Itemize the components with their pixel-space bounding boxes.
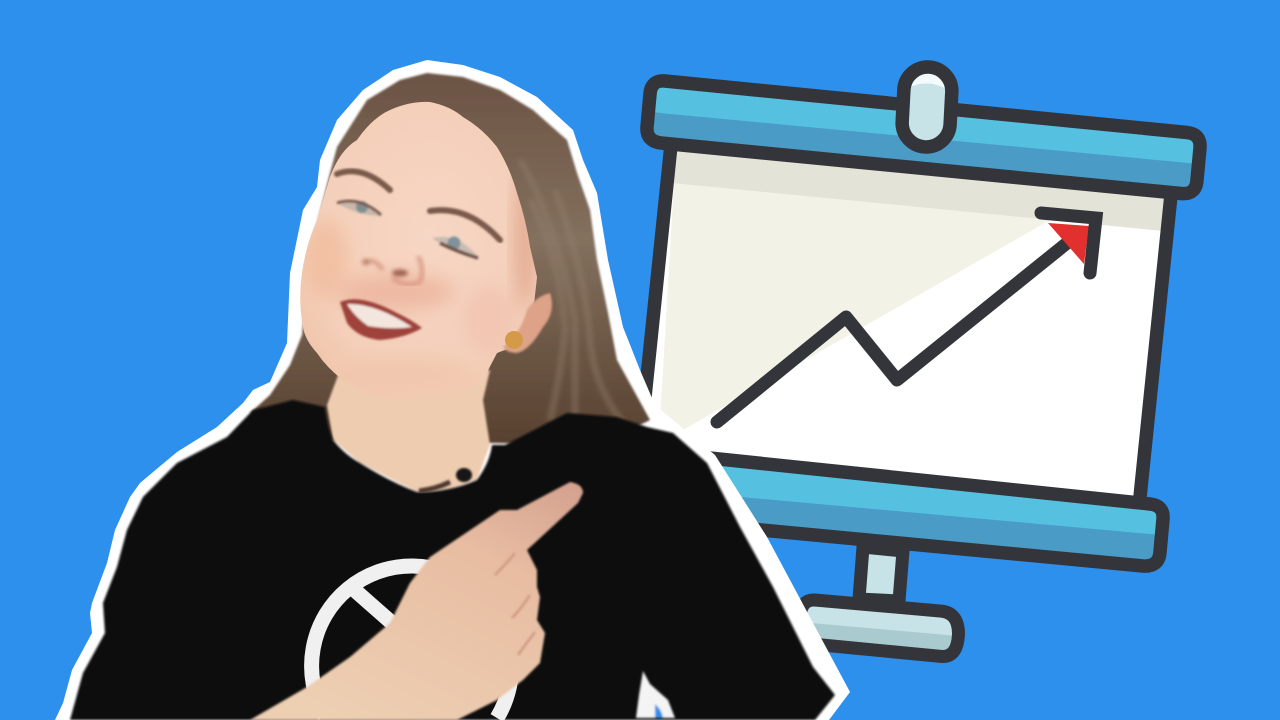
eyebrows bbox=[337, 171, 500, 240]
face bbox=[300, 102, 537, 377]
stand base bbox=[800, 600, 958, 657]
nose bbox=[362, 256, 422, 284]
ear bbox=[503, 293, 552, 353]
screen panel bbox=[640, 145, 1171, 497]
mouth bbox=[340, 299, 422, 340]
rising arrow line bbox=[717, 213, 1096, 422]
eyes bbox=[337, 201, 478, 258]
black t-shirt bbox=[70, 400, 835, 720]
hanging handle bbox=[901, 66, 953, 148]
white shape at lower right of shirt bbox=[636, 671, 675, 718]
bottom roller bar bbox=[700, 457, 1163, 566]
earring bbox=[505, 331, 523, 349]
lapel microphone bbox=[419, 468, 472, 491]
icon: projector screen with rising chart bbox=[640, 66, 1200, 657]
hair bbox=[250, 73, 650, 445]
finger creases bbox=[495, 553, 535, 655]
stand post bbox=[859, 547, 903, 601]
white sticker outline bbox=[55, 60, 850, 720]
neck bbox=[327, 370, 490, 492]
hair light strands bbox=[520, 160, 625, 425]
hand and pointing finger bbox=[250, 482, 583, 720]
top roller bar bbox=[647, 81, 1200, 194]
presenter cut-out bbox=[55, 60, 850, 720]
shirt logo bbox=[312, 566, 512, 718]
